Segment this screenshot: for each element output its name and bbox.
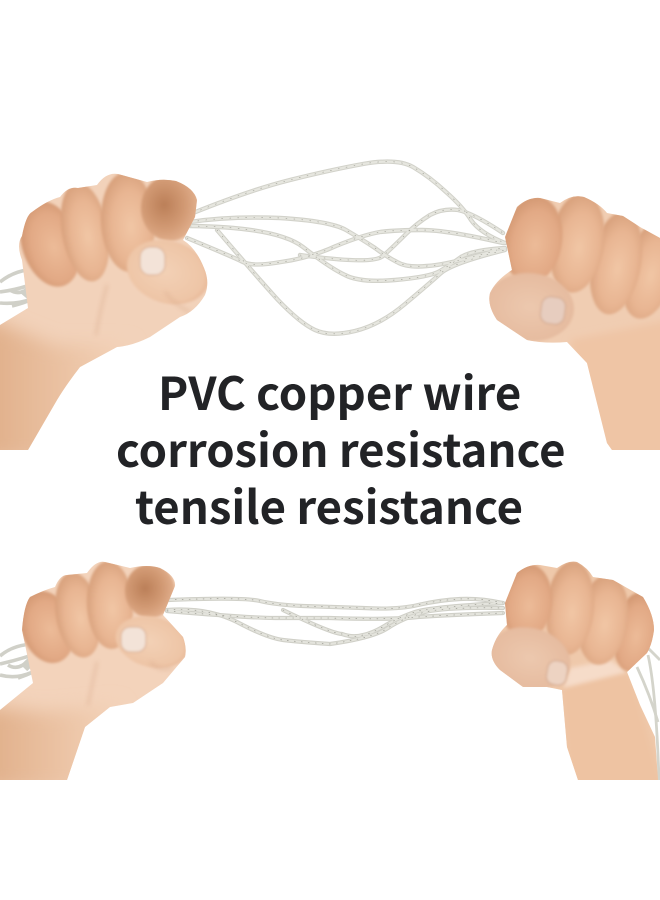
title line 2: corrosion resistance bbox=[116, 415, 566, 481]
thumb bbox=[126, 240, 208, 304]
forearm bbox=[570, 324, 660, 450]
finger 4 bbox=[614, 592, 654, 672]
palm creases bbox=[96, 285, 190, 335]
thumb bbox=[492, 627, 570, 688]
thumb nail bbox=[121, 627, 146, 652]
finger 3 bbox=[100, 174, 155, 272]
title bbox=[116, 358, 566, 538]
finger 4 bbox=[625, 228, 660, 320]
bottom right stray wires bbox=[637, 645, 660, 780]
forearm bbox=[0, 701, 108, 780]
top left wire bundle bbox=[0, 269, 58, 306]
top wires stretched loosely between hands bbox=[187, 162, 505, 334]
finger 2 bbox=[551, 196, 604, 294]
finger 3 bbox=[580, 578, 628, 666]
title line 3: tensile resistance bbox=[135, 472, 523, 538]
thumb bbox=[116, 615, 186, 668]
finger 3 bbox=[85, 560, 135, 650]
finger 1 bbox=[505, 198, 562, 276]
forearm bbox=[560, 672, 658, 780]
finger 2 bbox=[60, 186, 110, 282]
thumb nail bbox=[547, 661, 568, 686]
infographic canvas bbox=[0, 159, 660, 780]
finger 4 bbox=[141, 175, 199, 241]
top right stray wire bbox=[645, 312, 660, 338]
bottom left wire bundle bbox=[0, 644, 50, 678]
hand: bottom left fist bbox=[0, 562, 186, 780]
wrist pale band bbox=[563, 660, 627, 688]
bottom wires pulled taut between hands bbox=[167, 599, 503, 644]
finger 1 bbox=[22, 590, 71, 664]
thumb nail bbox=[140, 247, 165, 275]
hand: top right fist bbox=[483, 190, 660, 460]
finger 3 bbox=[589, 214, 641, 316]
palm creases bbox=[88, 664, 170, 702]
title line 1: PVC copper wire bbox=[158, 358, 521, 424]
finger 1 bbox=[505, 565, 550, 631]
thumb nail bbox=[540, 298, 565, 324]
finger 4 bbox=[125, 564, 175, 618]
forearm bbox=[0, 319, 120, 450]
hand: bottom right fist bbox=[492, 562, 658, 780]
finger 2 bbox=[546, 562, 592, 655]
finger 2 bbox=[54, 574, 99, 658]
finger 1 bbox=[20, 201, 78, 288]
hand: top left fist bbox=[0, 170, 218, 460]
thumb bbox=[489, 272, 574, 342]
